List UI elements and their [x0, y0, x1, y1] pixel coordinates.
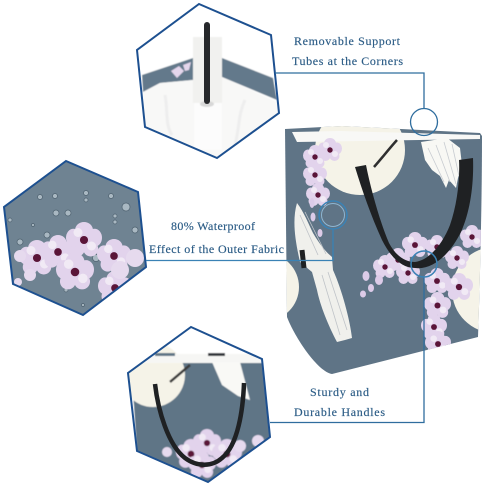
label: support tubes: Tubes at the Corners [292, 54, 403, 68]
crane legs [374, 140, 397, 167]
callout: waterproof fabric [146, 201, 347, 260]
panel: handles hexagon [121, 325, 275, 485]
label: waterproof fabric: Effect of the Outer Fabric [149, 242, 284, 256]
label: support tubes [292, 34, 403, 68]
panel: laundry basket [285, 126, 482, 374]
label: handles: Durable Handles [294, 405, 385, 419]
callout: handles [270, 251, 437, 422]
crane lower left [294, 203, 352, 342]
flowers right branch [360, 225, 484, 356]
icon: black handle [155, 383, 244, 465]
icon: basket handle [355, 158, 473, 268]
label: support tubes: Removable Support [294, 34, 401, 48]
moons [286, 126, 480, 330]
panel: waterproof fabric hexagon [0, 155, 150, 320]
inner lining [292, 131, 480, 142]
label: waterproof fabric [149, 219, 284, 256]
icon: water droplets [8, 190, 138, 306]
callout: support tubes [275, 34, 438, 136]
label: waterproof fabric: 80% Waterproof [171, 219, 255, 233]
label: handles: Sturdy and [310, 385, 369, 399]
flowers left branch [303, 138, 342, 237]
label: handles [294, 385, 385, 419]
panel: support tubes hexagon [130, 0, 285, 160]
crane wing upper right [421, 138, 462, 188]
icon: black support rod [204, 22, 210, 104]
flowers on fabric [14, 222, 144, 304]
